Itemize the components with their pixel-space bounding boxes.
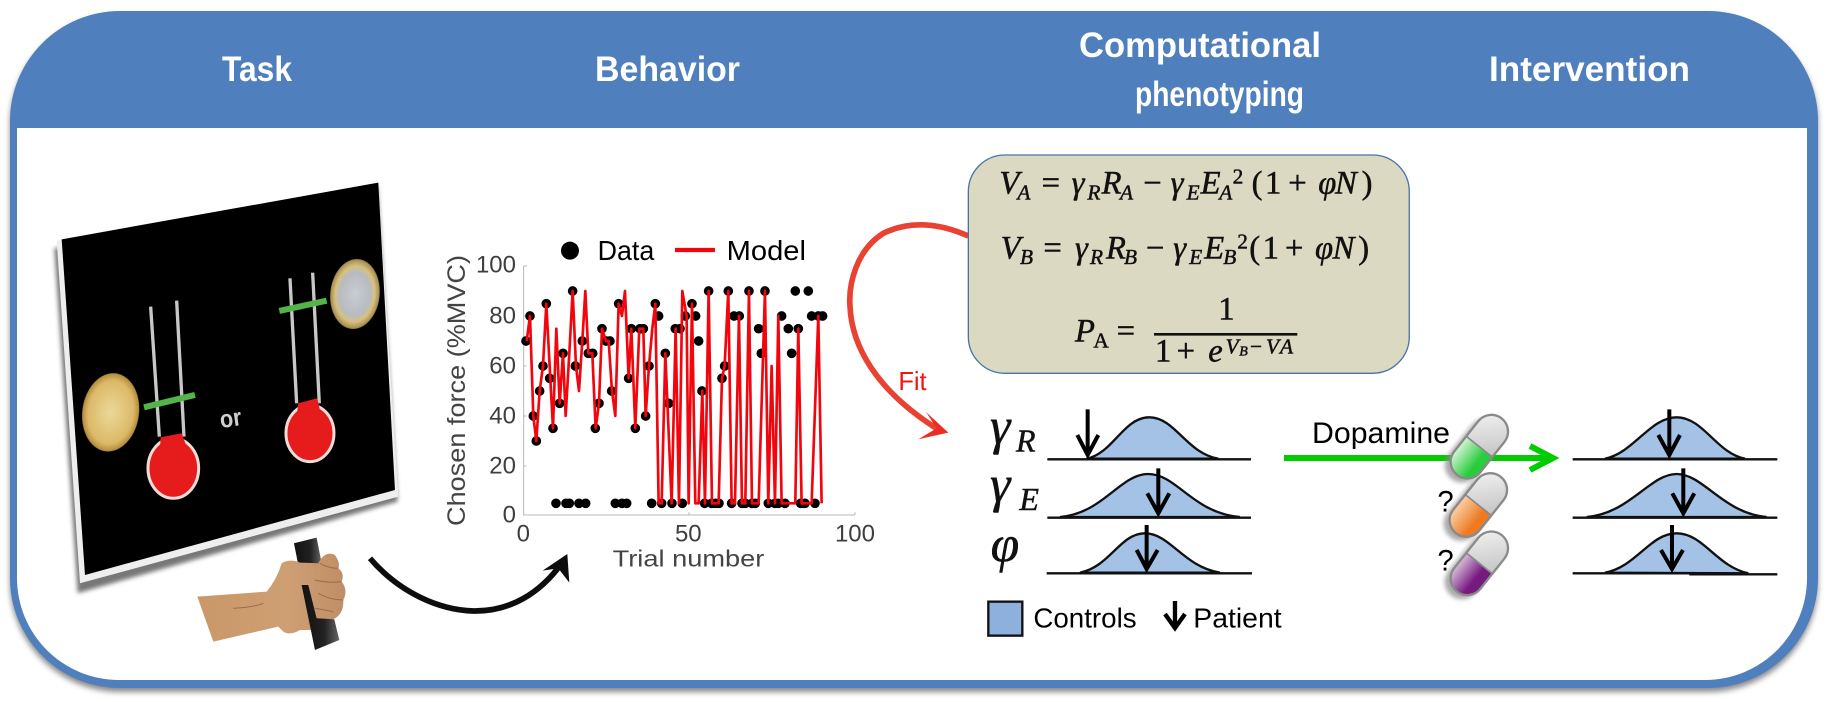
x axis title: Trial number xyxy=(613,546,765,572)
distribution: after gamma R xyxy=(1573,409,1777,459)
legend: Patient xyxy=(1193,603,1282,634)
equation: V_A: E xyxy=(1186,180,1200,204)
equation: P_A: A xyxy=(1093,328,1109,352)
equation: V_B: = xyxy=(1043,230,1062,266)
chart: chosen force by trial xyxy=(443,235,875,572)
equation: V_B: ) xyxy=(1358,230,1369,266)
heading: Behavior: Behavior xyxy=(595,50,740,89)
y tick labels: 0 xyxy=(503,502,516,529)
equation: V_A: A xyxy=(1118,180,1134,204)
panel: white content area xyxy=(17,128,1807,680)
equation: V_A: = xyxy=(1042,165,1060,201)
y tick labels: 20 xyxy=(489,452,516,479)
equation: V_A: A xyxy=(1015,180,1031,204)
y tick labels: 40 xyxy=(489,402,516,429)
chart legend xyxy=(561,235,806,266)
y tick labels xyxy=(476,252,516,529)
heading: Intervention: Intervention xyxy=(1489,50,1690,89)
distribution: gamma R xyxy=(1047,409,1251,459)
equation: V_A: γ xyxy=(1072,165,1086,201)
symbol: gamma E: γ xyxy=(990,457,1012,514)
equation: P_A: e xyxy=(1208,334,1223,370)
icon: silver coin xyxy=(327,257,383,331)
symbol: gamma E: E xyxy=(1018,481,1039,517)
heading: Computational phenotyping xyxy=(1079,26,1321,114)
equation: V_A: 2 xyxy=(1233,164,1243,188)
data points xyxy=(526,291,823,503)
label: Dopamine: Dopamine xyxy=(1312,417,1450,450)
equation: V_B: + xyxy=(1285,230,1303,266)
equation: V_B: B xyxy=(1020,245,1033,269)
equation: P_A: B xyxy=(1239,345,1248,360)
equation: V_A: γ xyxy=(1171,165,1185,201)
distribution: gamma E xyxy=(1047,468,1251,518)
y tick labels: 80 xyxy=(489,302,516,329)
icon: gold coin xyxy=(77,369,144,455)
label: Fit: Fit xyxy=(898,366,927,396)
equation: P_A: V xyxy=(1226,334,1242,358)
symbol: phi: φ xyxy=(991,517,1019,574)
chart legend: Model xyxy=(727,235,806,266)
axes xyxy=(524,266,855,515)
equation: V_B: R xyxy=(1105,230,1126,266)
equation: V_B: B xyxy=(1223,245,1236,269)
equation: P_A: 1 xyxy=(1155,334,1171,370)
equation: P_A: P xyxy=(1074,314,1095,350)
equation: V_A: ) xyxy=(1362,165,1373,201)
equation: V_A: φ xyxy=(1318,165,1336,201)
equation box xyxy=(968,155,1409,373)
heading: Computational phenotyping: Computational xyxy=(1079,26,1321,65)
equation: V_A: ( xyxy=(1252,165,1263,201)
model line xyxy=(527,291,822,503)
black arrow: task to behavior xyxy=(370,554,569,611)
equation: V_A: N xyxy=(1334,165,1359,201)
equation: V_A: + xyxy=(1288,165,1307,201)
distribution: phi xyxy=(1047,525,1252,573)
equation: P_A: = xyxy=(1117,314,1135,350)
equation: P_A: 1 xyxy=(1218,291,1235,327)
intervention pills and distributions xyxy=(1437,406,1777,607)
chart legend: Data xyxy=(598,235,655,266)
thermometer left xyxy=(144,301,199,498)
equation: V_A: A xyxy=(1217,180,1233,204)
equation: V_B: ( xyxy=(1249,230,1260,266)
y axis title: Chosen force (%MVC) xyxy=(443,255,471,526)
equation: V_B: γ xyxy=(1075,230,1089,266)
equation: V_A: R xyxy=(1101,165,1122,201)
x tick labels xyxy=(517,521,875,548)
equation: V_A: V xyxy=(999,165,1023,201)
symbol: gamma R: γ xyxy=(990,398,1012,455)
heading: Task: Task xyxy=(222,50,292,89)
y tick labels: 60 xyxy=(489,352,516,379)
equation: V_B: γ xyxy=(1173,230,1187,266)
equation: V_B: B xyxy=(1124,245,1137,269)
heading: Computational phenotyping: phenotyping xyxy=(1135,75,1304,114)
equation: P_A: + xyxy=(1177,334,1195,370)
equation: V_A: E xyxy=(1200,165,1221,201)
label: question mark orange: ? xyxy=(1437,486,1454,519)
equation: V_B: 1 xyxy=(1263,230,1279,266)
red arrow: fit xyxy=(850,225,968,439)
legend xyxy=(988,601,1282,636)
label: question mark purple: ? xyxy=(1437,545,1454,578)
thermometer right xyxy=(279,273,334,462)
equation: P_A xyxy=(1074,291,1297,370)
text: or: or xyxy=(218,404,244,434)
equation: V_B: N xyxy=(1332,230,1357,266)
equation: P_A: − xyxy=(1250,334,1262,358)
x tick labels: 100 xyxy=(835,521,875,548)
x tick labels: 50 xyxy=(675,521,702,548)
legend: Controls xyxy=(1033,603,1137,634)
controls distributions with patient arrows xyxy=(988,398,1282,636)
x tick labels: 0 xyxy=(517,521,530,548)
equation: V_B: 2 xyxy=(1237,229,1248,253)
y tick labels: 100 xyxy=(476,252,516,279)
task screen xyxy=(54,183,398,650)
equation: V_B: R xyxy=(1089,245,1103,269)
icon: hand gripping handle xyxy=(197,538,345,650)
equation: V_B: V xyxy=(1001,230,1025,266)
equation: V_B: − xyxy=(1146,230,1164,266)
pill: orange xyxy=(1437,465,1514,549)
distribution: after gamma E xyxy=(1573,468,1777,518)
distribution: after phi xyxy=(1573,525,1777,574)
equation: V_A: − xyxy=(1143,165,1162,201)
equation: V_B: E xyxy=(1203,230,1224,266)
equation: V_B: E xyxy=(1188,245,1202,269)
equation: V_A: R xyxy=(1086,180,1100,204)
equation: V_B: φ xyxy=(1315,230,1333,266)
equation: P_A: V xyxy=(1266,334,1282,358)
equation: V_A: 1 xyxy=(1265,165,1281,201)
equation: P_A: A xyxy=(1278,334,1294,358)
pill: purple xyxy=(1438,523,1515,607)
symbol: gamma R: R xyxy=(1015,423,1036,459)
arrow: dopamine xyxy=(1284,446,1553,470)
pill: green xyxy=(1438,406,1515,490)
